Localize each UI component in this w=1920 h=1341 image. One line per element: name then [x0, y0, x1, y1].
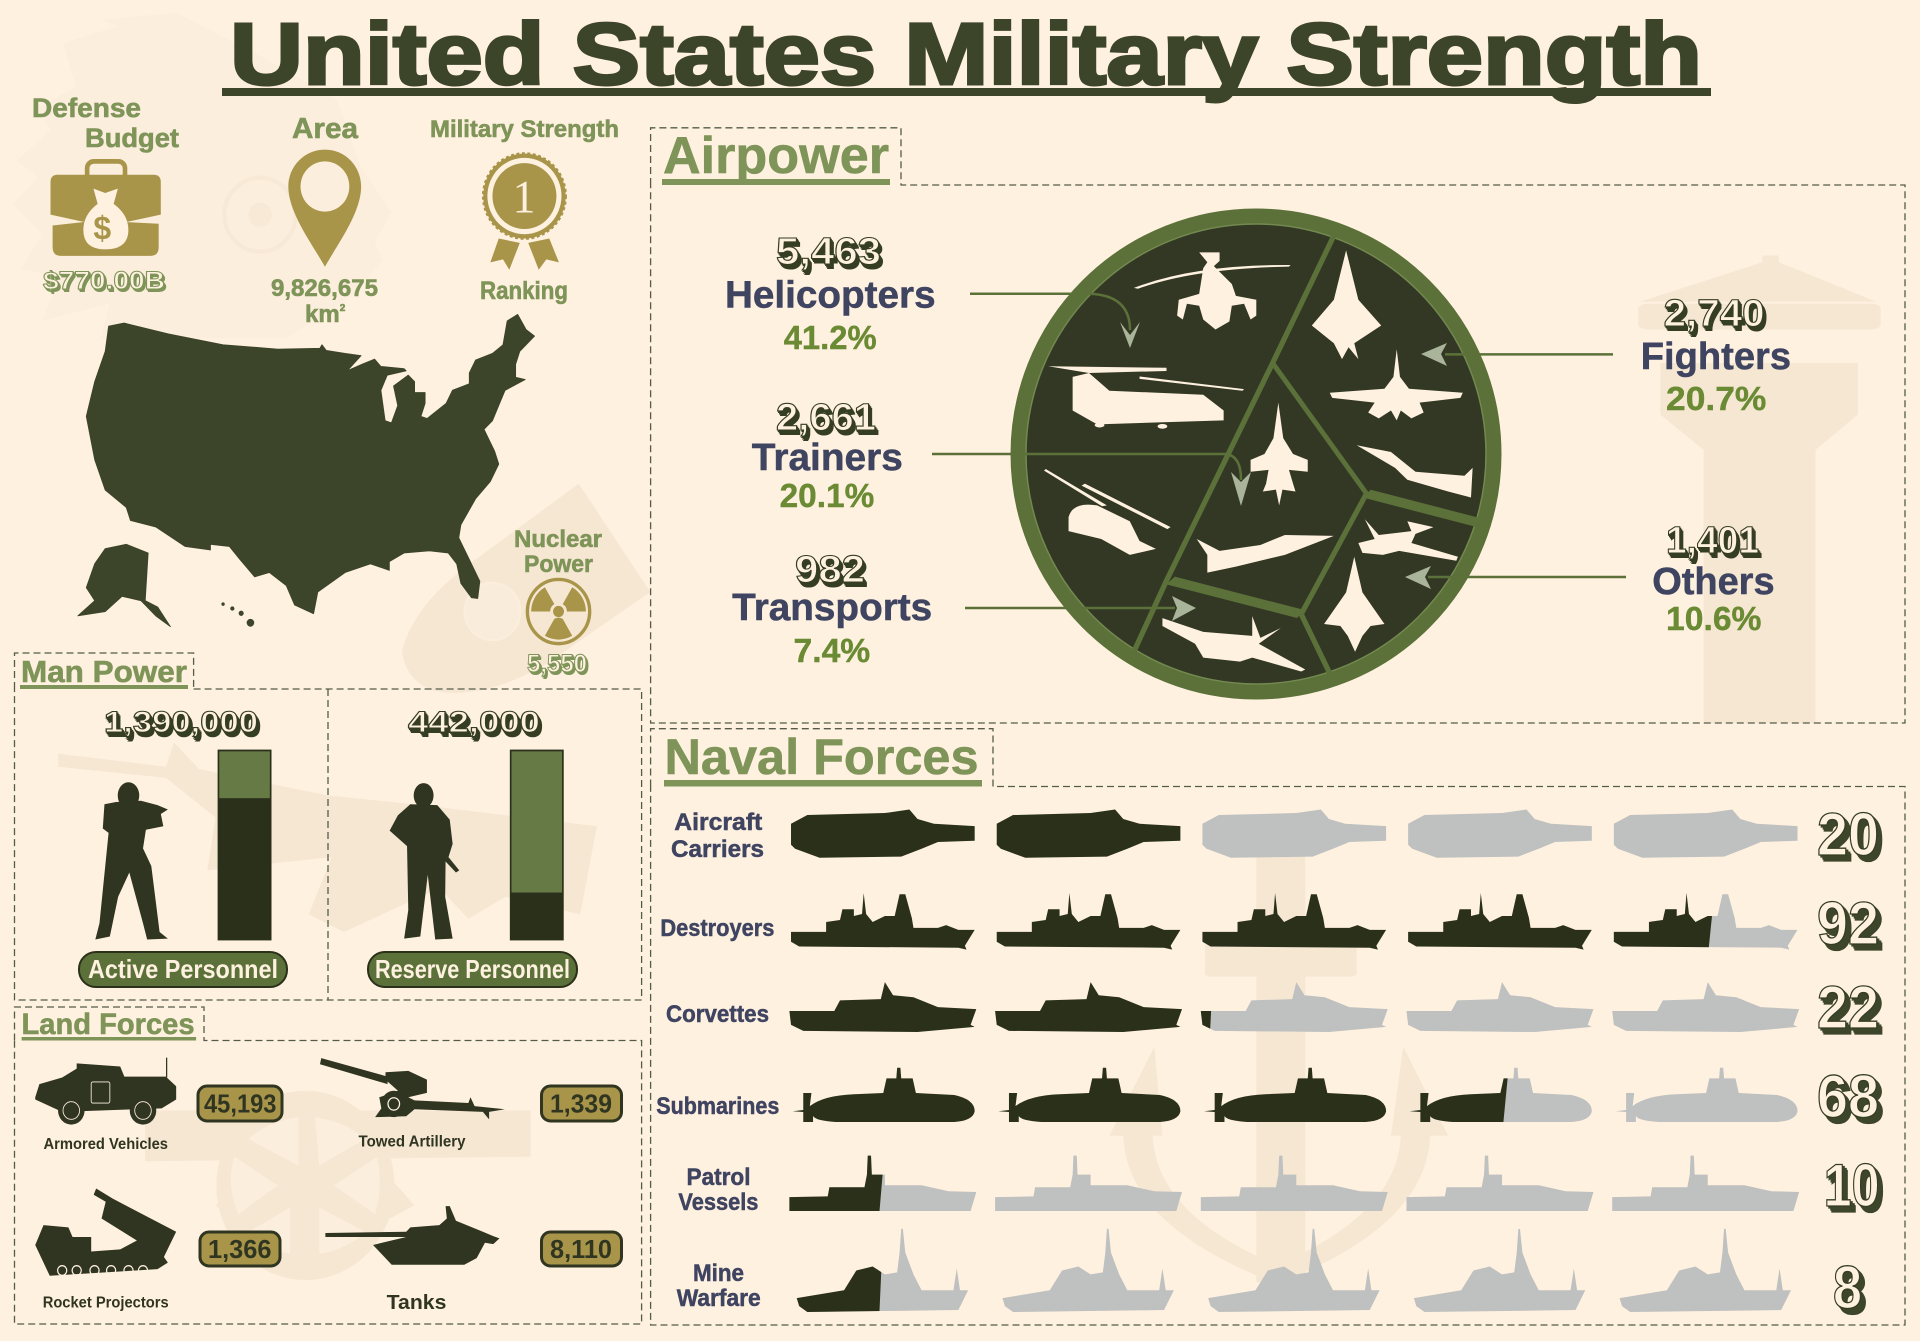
- icon: medal: 1: [513, 171, 535, 223]
- watermark: artillery wheel: [145, 1095, 531, 1276]
- nuclear power: Nuclear: [514, 526, 602, 553]
- pointer: others: [1405, 566, 1626, 589]
- stat: trainers: 2,661: [776, 397, 876, 439]
- reserve personnel count: 442,000: [408, 706, 540, 739]
- stat: others: [1652, 520, 1775, 637]
- stat: transports: 982: [795, 549, 865, 591]
- icon: briefcase with money bag: [51, 161, 161, 256]
- watermark: chief headdress: [13, 13, 391, 338]
- heading: airpower: Airpower: [663, 127, 889, 185]
- stat: helicopters: 41.2%: [784, 319, 877, 356]
- row: corvettes: [666, 982, 1882, 1035]
- row: submarines: [656, 1068, 1883, 1124]
- aircraft silhouettes: [1044, 250, 1473, 671]
- row: patrol vessels: Vessels: [678, 1189, 758, 1216]
- stat: helicopters: Helicopters: [725, 275, 936, 317]
- icon: reserve soldier: [390, 783, 459, 940]
- stat: fighters: 2,740: [1664, 293, 1765, 335]
- badge: armored vehicles count: 45,193: [204, 1089, 276, 1119]
- row: patrol vessels: Patrol: [686, 1164, 750, 1191]
- icon: briefcase with money bag: $: [93, 210, 111, 247]
- nuclear power: [514, 526, 602, 678]
- stat: fighters: [1641, 293, 1791, 417]
- heading: naval forces: Naval Forces: [664, 729, 978, 785]
- row: aircraft carriers: Aircraft: [674, 809, 762, 836]
- icon: rocket projector: [35, 1189, 176, 1276]
- icon: location pin: [288, 150, 361, 267]
- row: aircraft carriers: Carriers: [671, 836, 764, 863]
- stat: helicopters: [725, 231, 936, 356]
- active personnel count: 1,390,000: [104, 706, 258, 739]
- stat: fighters: 20.7%: [1666, 380, 1766, 417]
- panel: land forces: [14, 1007, 642, 1324]
- stat: trainers: [752, 397, 903, 514]
- pointer: transports: [965, 596, 1196, 621]
- stat: transports: Transports: [732, 587, 932, 629]
- row: mine warfare: 8: [1833, 1254, 1862, 1321]
- row: aircraft carriers: [671, 801, 1879, 868]
- stat: others: 10.6%: [1666, 600, 1762, 637]
- watermark: watchtower: [1638, 256, 1881, 723]
- badge: tanks count: 8,110: [550, 1234, 612, 1264]
- bar: reserve personnel: [511, 750, 563, 940]
- label: tanks: Tanks: [387, 1292, 446, 1314]
- icon: armored vehicle: [35, 1058, 176, 1125]
- military strength ranking: [430, 116, 619, 305]
- icon: radiation symbol: [527, 579, 590, 644]
- badge: towed artillery count: [542, 1086, 622, 1121]
- row: patrol vessels: [678, 1156, 1884, 1214]
- area: 2: [340, 303, 346, 314]
- row: aircraft carriers: 20: [1817, 801, 1879, 868]
- row: destroyers: 92: [1817, 890, 1879, 957]
- heading: man power: Man Power: [21, 654, 187, 689]
- stat: transports: 7.4%: [794, 632, 870, 669]
- row: mine warfare: Mine: [693, 1260, 744, 1287]
- military strength ranking: Military Strength: [430, 116, 619, 143]
- stat: trainers: Trainers: [752, 437, 903, 479]
- watermark: nuclear bomb: [402, 484, 650, 693]
- area: 9,826,675: [271, 275, 378, 302]
- panel: man power: [14, 653, 642, 1000]
- row: corvettes: Corvettes: [666, 1001, 769, 1028]
- pointer: fighters: [1421, 343, 1613, 366]
- map: united states: [78, 314, 535, 627]
- nuclear power: Power: [524, 551, 593, 578]
- panel: airpower: [651, 127, 1905, 723]
- label: towed artillery: Towed Artillery: [358, 1134, 466, 1151]
- pie chart: aircraft types: [1018, 216, 1494, 692]
- area: km: [305, 301, 340, 328]
- icon: towed artillery: [320, 1058, 505, 1119]
- badge: rocket projectors count: 1,366: [208, 1234, 272, 1264]
- row: submarines: 68: [1817, 1063, 1879, 1130]
- row: corvettes: 22: [1817, 974, 1879, 1041]
- stat: others: 1,401: [1666, 520, 1759, 562]
- label: armored vehicles: Armored Vehicles: [44, 1136, 168, 1153]
- icon: medal: [483, 154, 566, 270]
- pointer: trainers: [932, 454, 1251, 506]
- defense budget: $770.00B: [43, 267, 165, 295]
- area: Area: [292, 113, 359, 145]
- icon: active soldier: [95, 782, 168, 940]
- title: United States Military Strength: [230, 6, 1702, 103]
- stat: trainers: 20.1%: [780, 477, 874, 514]
- nuclear power: 5,550: [527, 650, 587, 678]
- military strength ranking: Ranking: [480, 277, 568, 305]
- label: active personnel: Active Personnel: [88, 954, 278, 984]
- area: [271, 113, 378, 328]
- stat: fighters: Fighters: [1641, 336, 1791, 378]
- label: rocket projectors: Rocket Projectors: [43, 1294, 169, 1312]
- badge: towed artillery count: 1,339: [550, 1089, 612, 1119]
- row: submarines: Submarines: [656, 1093, 779, 1120]
- pointer: helicopters: [970, 294, 1140, 348]
- row: patrol vessels: 10: [1824, 1152, 1880, 1219]
- label: reserve personnel: Reserve Personnel: [375, 954, 570, 984]
- watermark: anchor: [1109, 855, 1448, 1282]
- defense budget: [32, 93, 179, 295]
- stat: transports: [732, 549, 932, 669]
- watermark: rifle: [58, 743, 597, 932]
- row: destroyers: [662, 893, 1882, 952]
- defense budget: Budget: [85, 123, 179, 153]
- row: mine warfare: [677, 1229, 1862, 1321]
- icon: tank: [325, 1206, 499, 1265]
- heading: land forces: Land Forces: [22, 1008, 194, 1041]
- stat: helicopters: 5,463: [776, 231, 881, 273]
- stat: others: Others: [1652, 561, 1775, 603]
- row: destroyers: Destroyers: [660, 915, 774, 942]
- bar: active personnel: [218, 750, 271, 940]
- defense budget: Defense: [32, 93, 141, 123]
- panel: naval forces: [651, 729, 1905, 1325]
- row: mine warfare: Warfare: [677, 1285, 761, 1312]
